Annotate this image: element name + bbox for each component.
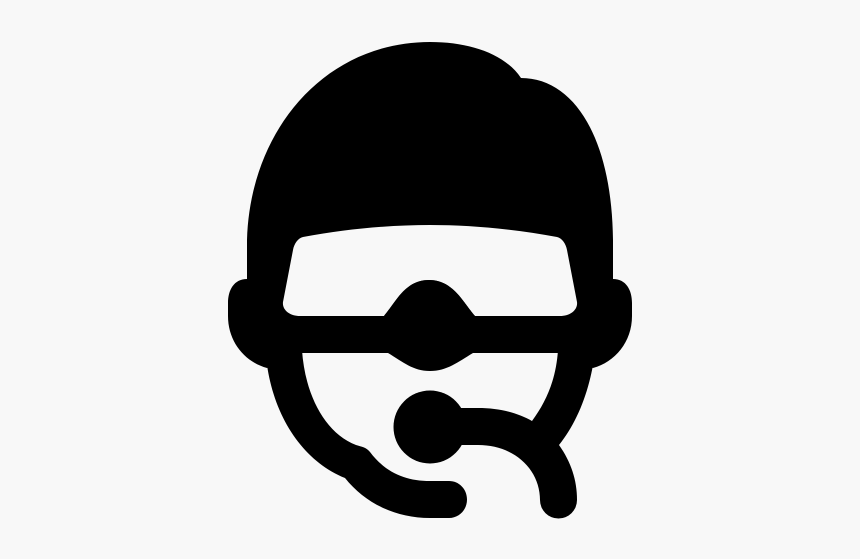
left jaw and headset cord [267, 350, 467, 518]
goggle strap and nose piece [285, 280, 575, 371]
hair, ears and visor cut-out [228, 42, 632, 368]
right jaw [532, 350, 593, 450]
headset microphone [394, 390, 577, 518]
